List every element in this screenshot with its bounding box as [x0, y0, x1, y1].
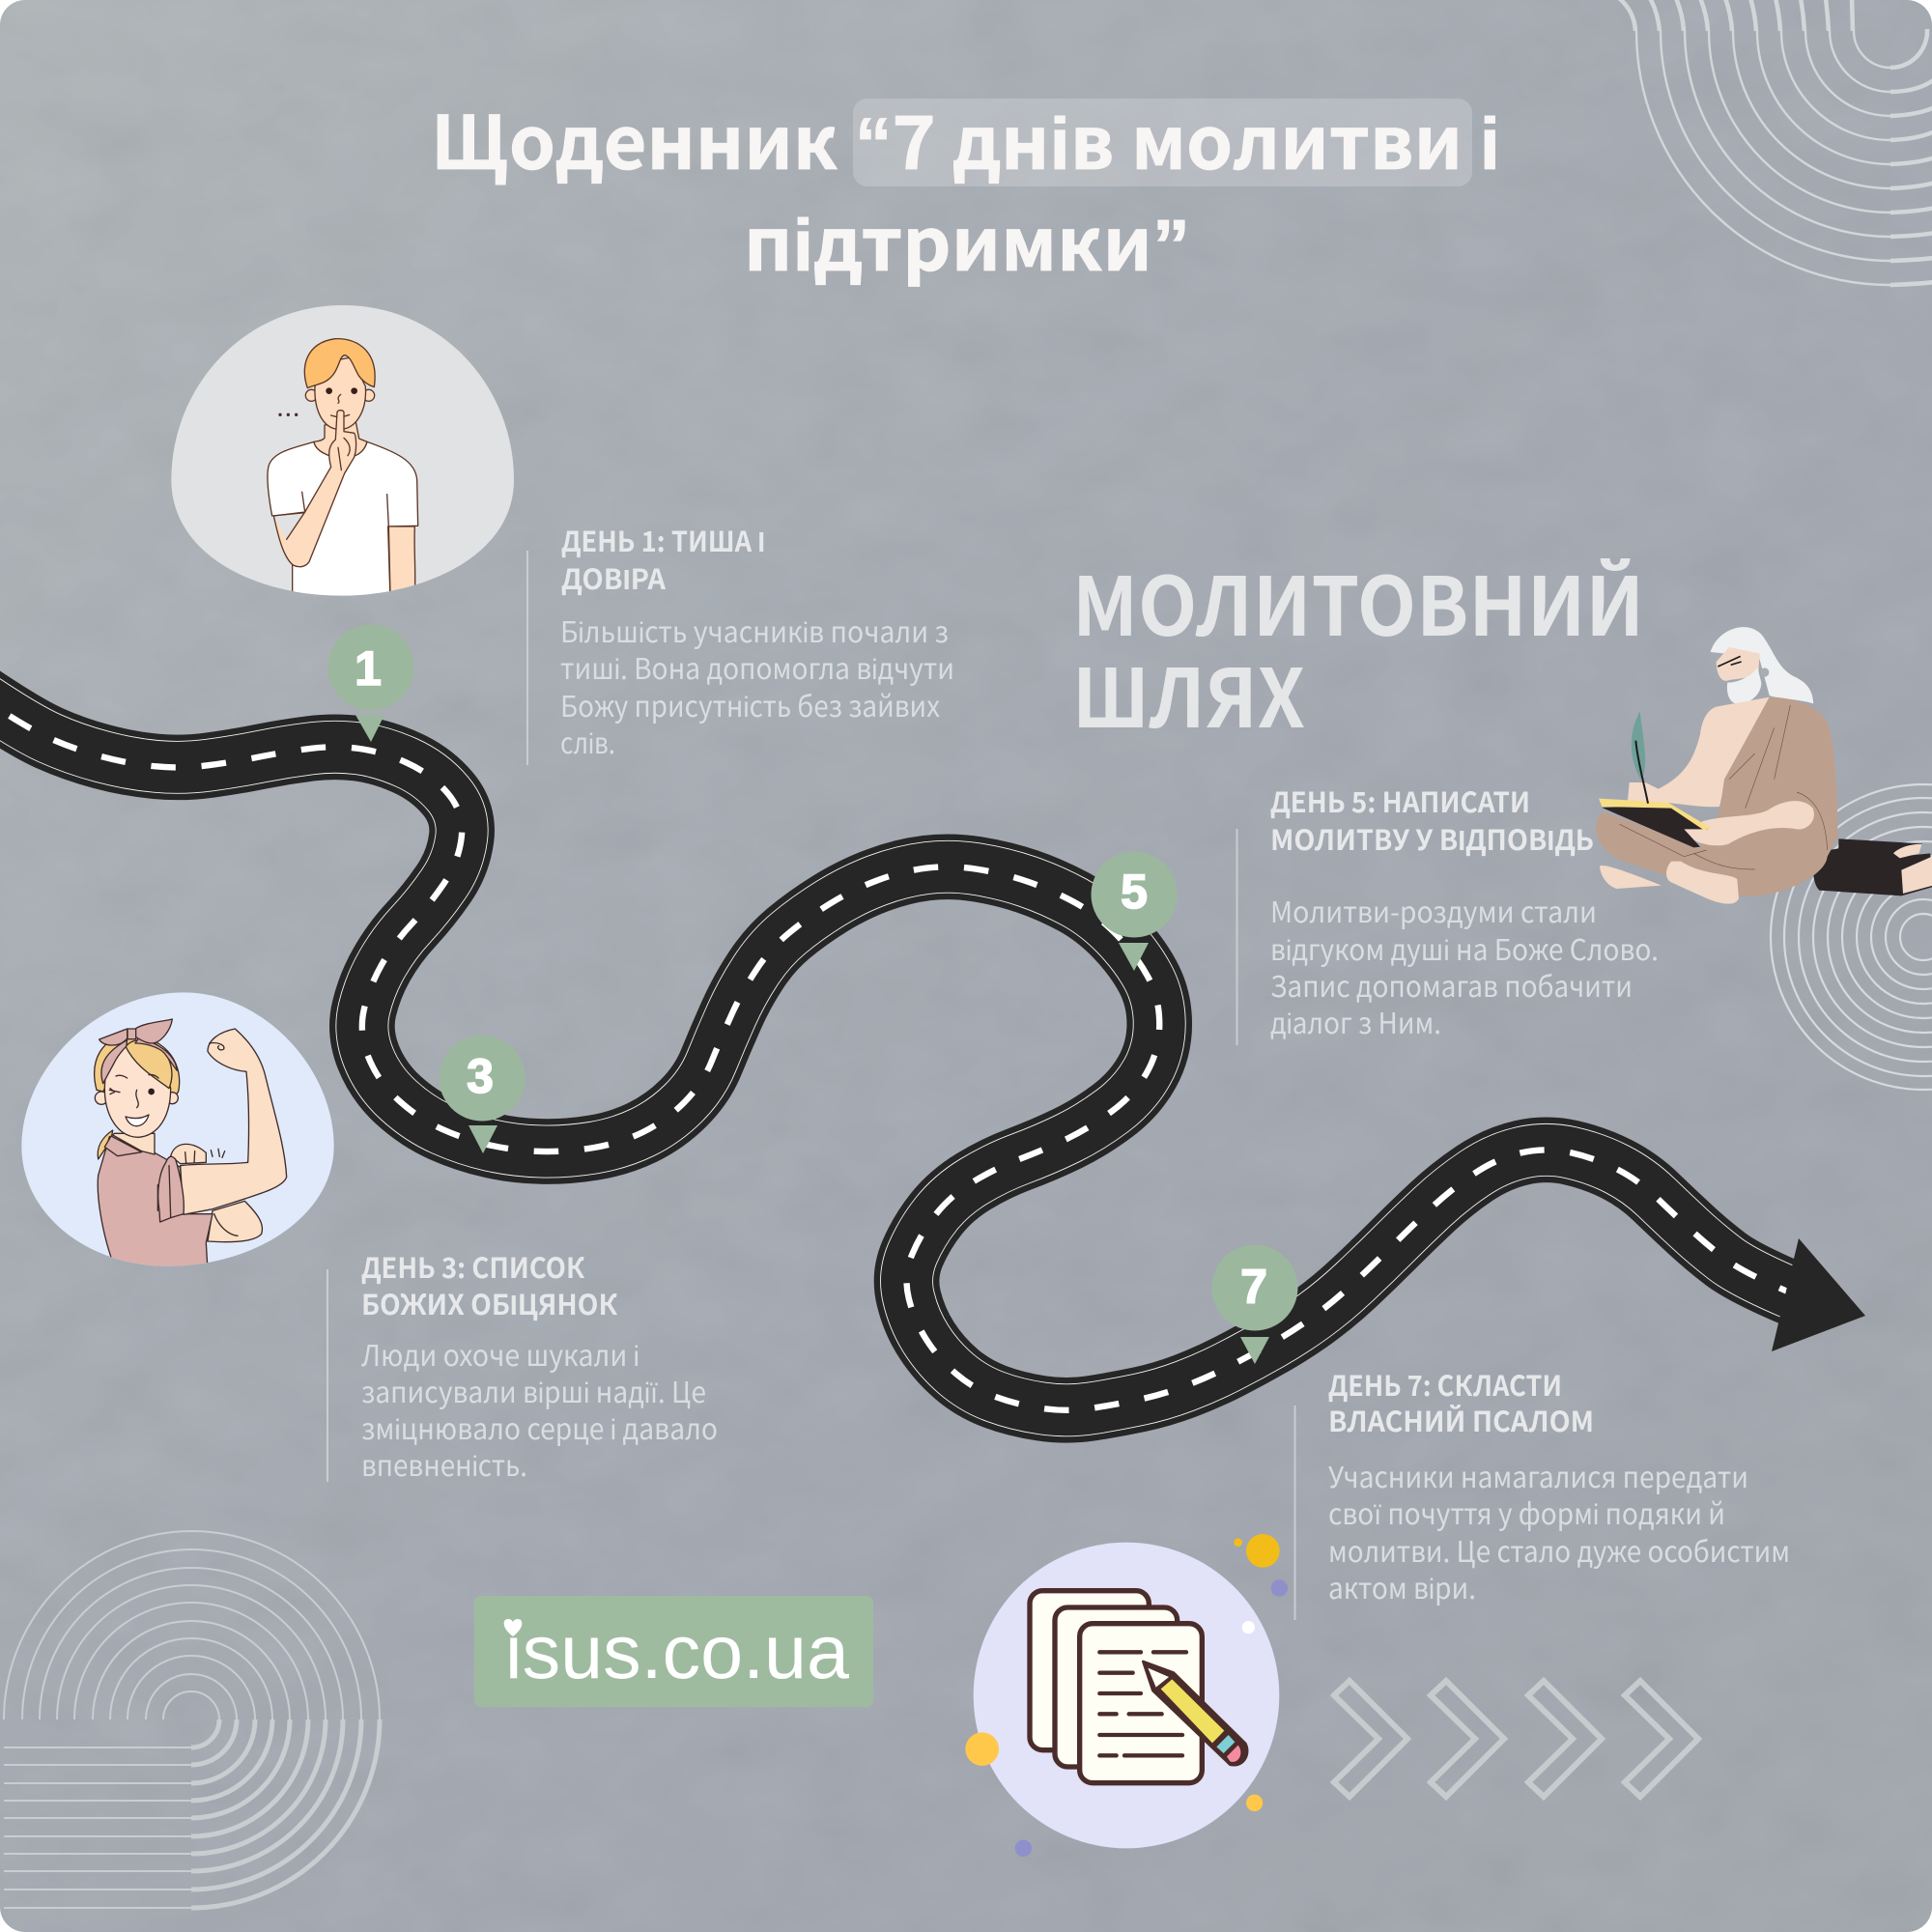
- marker 7: 7: [1240, 1260, 1267, 1314]
- text block: day 1: тиші. Вона допомогла відчути: [560, 645, 954, 688]
- text block: day 7: ДЕНЬ 7: СКЛАСТИ: [1328, 1364, 1562, 1405]
- title highlight: [853, 99, 1472, 186]
- text block: day 3: [327, 1246, 718, 1485]
- decoration: concentric arcs bottom left: [4, 1531, 380, 1908]
- text block: day 1: [527, 520, 954, 765]
- text block: day 7: актом віри.: [1328, 1565, 1476, 1607]
- text block: day 1: ДЕНЬ 1: ТИША І: [561, 520, 765, 560]
- road: [0, 694, 1793, 1410]
- text block: day 5: Запис допомагав побачити: [1270, 963, 1633, 1006]
- decoration: concentric rings right: [1771, 784, 1932, 1090]
- marker 1: [328, 624, 413, 742]
- icon: books: [1813, 838, 1932, 895]
- text block: day 3: ДЕНЬ 3: СПИСОК: [361, 1246, 585, 1287]
- text block: day 7: ВЛАСНИЙ ПСАЛОМ: [1328, 1400, 1594, 1440]
- panel: day 1 illustration: [171, 305, 514, 599]
- text block: day 1: Більшість учасників почали з: [560, 609, 949, 651]
- text block: day 5: діалог з Ним.: [1270, 1000, 1441, 1042]
- heading: prayer path: МОЛИТОВНИЙ: [1072, 543, 1644, 660]
- decoration: concentric arcs top right: [1619, 0, 1932, 285]
- text block: day 5: відгуком душі на Боже Слово.: [1270, 926, 1659, 969]
- text block: day 1: слів.: [560, 720, 615, 762]
- marker 1: 1: [355, 641, 382, 696]
- marker 5: 5: [1121, 865, 1148, 919]
- text block: day 1: Божу присутність без зайвих: [560, 683, 940, 725]
- chevron arrows: [1334, 1681, 1698, 1797]
- text block: day 7: свої почуття у формі подяки й: [1328, 1491, 1725, 1533]
- text block: day 3: зміцнювало серце і давало: [361, 1406, 718, 1448]
- marker 3: 3: [467, 1049, 494, 1103]
- marker 3: [439, 1036, 526, 1153]
- panel: day 3 illustration: [21, 992, 334, 1270]
- text block: day 7: Учасники намагалися передати: [1328, 1454, 1748, 1496]
- text block: day 7: [1294, 1364, 1790, 1620]
- text block: day 3: записували вірші надії. Це: [361, 1369, 706, 1411]
- text block: day 5: МОЛИТВУ У ВІДПОВІДЬ: [1270, 818, 1594, 859]
- website badge: [474, 1596, 873, 1707]
- road arrow head: [1772, 1238, 1865, 1351]
- heading: prayer path: [1072, 543, 1644, 752]
- panel: day 7 illustration, documents and pencil: [965, 1534, 1288, 1857]
- title: підтримки”: [744, 185, 1190, 292]
- text block: day 3: БОЖИХ ОБІЦЯНОК: [361, 1283, 618, 1323]
- heading: prayer path: ШЛЯХ: [1072, 635, 1305, 752]
- text block: day 5: Молитви-роздуми стали: [1270, 889, 1597, 931]
- text block: day 5: ДЕНЬ 5: НАПИСАТИ: [1270, 781, 1530, 821]
- text block: day 3: впевненість.: [361, 1442, 527, 1485]
- text block: day 3: Люди охоче шукали і: [361, 1332, 639, 1375]
- title: [431, 84, 1500, 292]
- text block: day 7: молитви. Це стало дуже особистим: [1328, 1528, 1790, 1571]
- marker 5: [1092, 852, 1177, 971]
- panel: day 5 illustration, writing sage: [1596, 627, 1932, 904]
- website badge: isus.co.ua: [505, 1608, 849, 1694]
- text block: day 5: [1236, 781, 1659, 1045]
- text block: day 1: ДОВІРА: [561, 557, 666, 598]
- marker 7: [1211, 1244, 1298, 1364]
- title: Щоденник “7 днів молитви і: [431, 84, 1500, 190]
